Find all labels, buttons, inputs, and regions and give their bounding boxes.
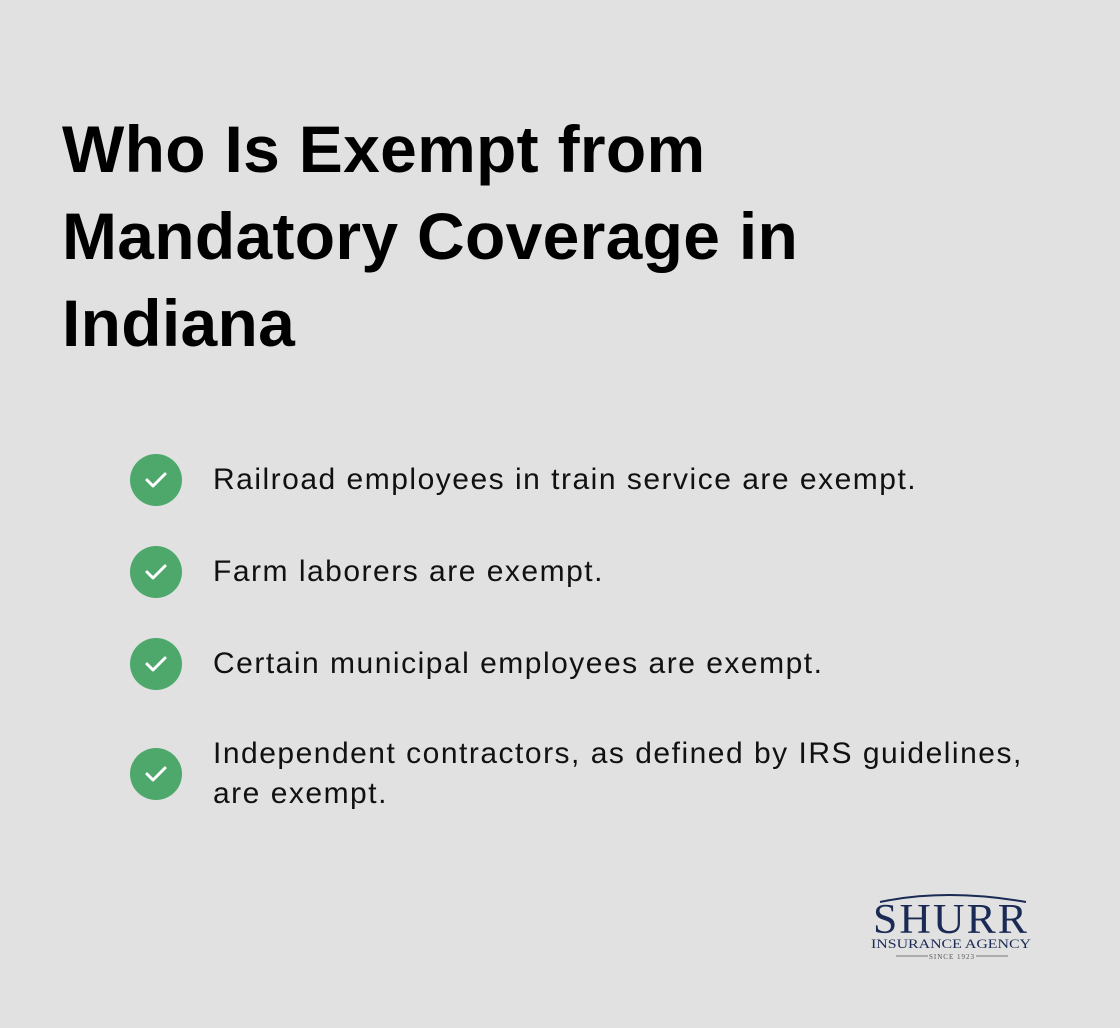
text: Independent contractors, as defined by IRS guidelines, [213, 737, 1023, 770]
icon: check [130, 454, 182, 506]
title: Indiana [62, 286, 295, 360]
item 2 [130, 546, 604, 598]
logo [871, 894, 1032, 960]
item 4 [130, 737, 1023, 810]
title: Who Is Exempt from [62, 112, 705, 186]
logo: INSURANCE AGENCY [871, 936, 1032, 951]
item 3 [130, 638, 823, 690]
text: Certain municipal employees are exempt. [213, 647, 823, 680]
text: are exempt. [213, 777, 388, 810]
icon: check [130, 546, 182, 598]
icon: check [130, 748, 182, 800]
text [213, 737, 1023, 810]
logo: SHURR [873, 897, 1029, 943]
icon: check [130, 638, 182, 690]
title [62, 112, 798, 360]
title: Mandatory Coverage in [62, 199, 798, 273]
text: Farm laborers are exempt. [213, 555, 604, 588]
text: Railroad employees in train service are exempt. [213, 463, 917, 496]
item 1 [130, 454, 917, 506]
